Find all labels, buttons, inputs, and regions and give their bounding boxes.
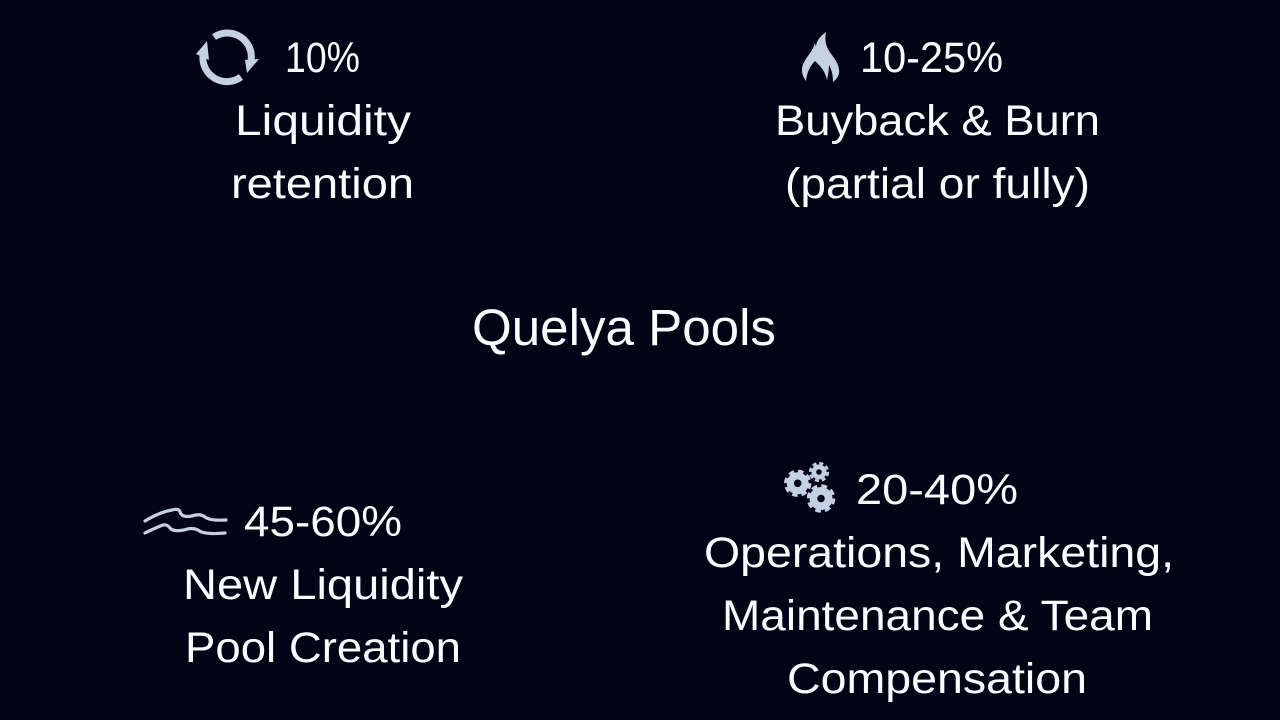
percentage: 10-25%: 10-25% bbox=[860, 34, 1003, 82]
label: New Liquidity Pool Creation: New Liquidity bbox=[183, 561, 464, 609]
panel: operations and compensation bbox=[704, 463, 1174, 703]
label: Buyback and Burn: Buyback & Burn bbox=[775, 97, 1100, 145]
label: Operations, Marketing, Maintenance and Team Compensation: Operations, Marketing, bbox=[704, 529, 1174, 577]
heading: Quelya Pools: Quelya Pools bbox=[472, 299, 776, 356]
icon: gears bbox=[786, 463, 834, 511]
label: Liquidity retention bbox=[231, 97, 414, 208]
percentage: 20-40%: 20-40% bbox=[856, 466, 1018, 514]
panel: buyback and burn bbox=[775, 32, 1100, 208]
label: Buyback and Burn: (partial or fully) bbox=[785, 160, 1090, 208]
label: Liquidity retention: retention bbox=[231, 160, 414, 208]
label: Buyback and Burn bbox=[775, 97, 1100, 208]
icon: flame bbox=[802, 32, 839, 82]
icon: circular arrows bbox=[196, 33, 259, 82]
label: Operations, Marketing, Maintenance and Team Compensation bbox=[704, 529, 1174, 703]
label: Operations, Marketing, Maintenance and Team Compensation: Compensation bbox=[787, 655, 1087, 703]
panel: new liquidity pool creation bbox=[145, 498, 464, 672]
percentage: 45-60%: 45-60% bbox=[244, 498, 402, 546]
icon: waves bbox=[145, 509, 226, 534]
panel: liquidity retention bbox=[196, 33, 414, 208]
label: New Liquidity Pool Creation bbox=[183, 561, 464, 672]
label: New Liquidity Pool Creation: Pool Creation bbox=[185, 624, 461, 672]
label: Liquidity retention: Liquidity bbox=[235, 97, 412, 145]
label: Operations, Marketing, Maintenance and Team Compensation: Maintenance & Team bbox=[722, 592, 1153, 640]
percentage: 10%: 10% bbox=[285, 34, 360, 82]
